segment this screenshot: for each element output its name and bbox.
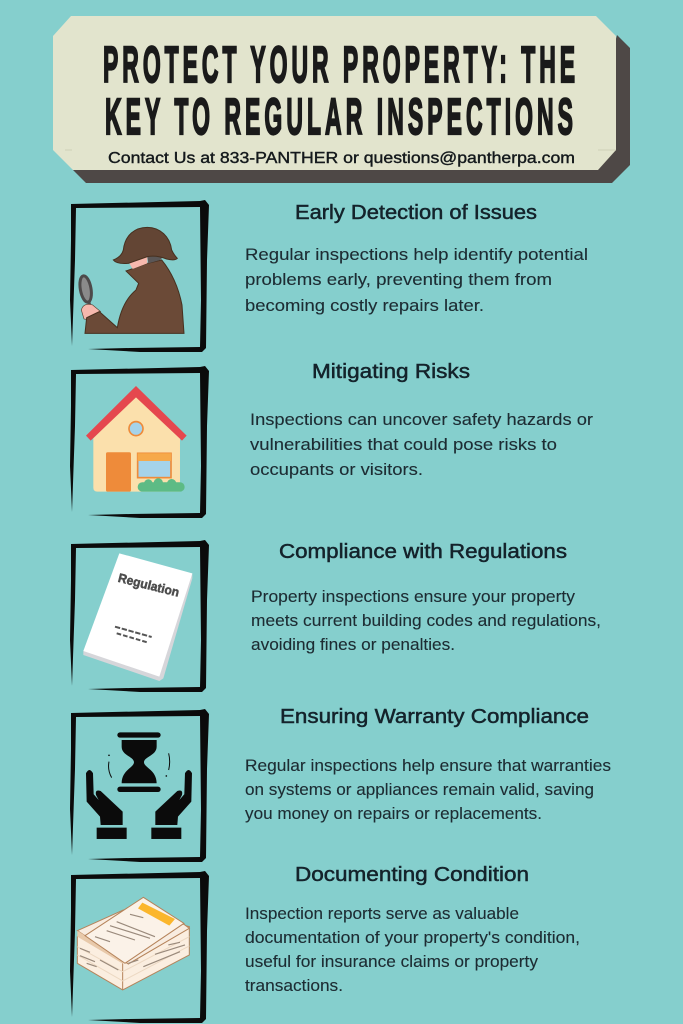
left hand [86,770,127,839]
title banner [53,16,630,183]
body text: meets current building codes and regulations, [251,612,601,630]
body text: vulnerabilities that could pose risks to [250,436,557,454]
body text: on systems or appliances remain valid, saving [245,781,594,799]
panel: documenting condition [70,864,580,1023]
body text [245,905,580,995]
title: PROTECT YOUR PROPERTY: THE [103,37,575,94]
icon: regulation document [83,553,192,681]
body text [250,411,594,479]
heading: Ensuring Warranty Compliance [280,706,589,728]
body text: problems early, preventing them from [245,271,552,289]
panel: compliance with regulations [70,540,601,692]
body text: Regular inspections help ensure that warranties [245,757,611,775]
title: KEY TO REGULAR INSPECTIONS [105,89,573,146]
icon: detective [78,227,184,333]
heading: Compliance with Regulations [279,541,567,563]
body text: transactions. [245,977,343,995]
icon: house [86,386,187,492]
body text: you money on repairs or replacements. [245,805,542,823]
title [103,37,575,146]
heading: Early Detection of Issues [295,202,537,224]
icon: stack of documents [77,897,189,990]
heading: Documenting Condition [295,864,529,886]
panel: mitigating risks [70,361,594,518]
right hand [151,770,192,839]
body text: Inspections can uncover safety hazards or [250,411,594,429]
body text: avoiding fines or penalties. [251,636,455,654]
frame [70,540,209,692]
frame [70,200,209,352]
icon: regulation document: Regulation [117,571,181,600]
body text: becoming costly repairs later. [245,297,484,315]
frame [70,366,209,518]
frame [70,871,209,1023]
icon: hourglass in hands [86,732,192,839]
body text: Regular inspections help identify potential [245,246,588,264]
body text: useful for insurance claims or property [245,953,539,971]
body text: Property inspections ensure your property [251,588,576,606]
panel: early detection [70,200,588,352]
frame [70,709,209,862]
body text: occupants or visitors. [250,461,423,479]
heading: Mitigating Risks [312,361,470,383]
panel: warranty compliance [70,706,611,862]
body text [245,757,611,823]
body text [251,588,601,654]
body text: Inspection reports serve as valuable [245,905,519,923]
contact line: Contact Us at 833-PANTHER or questions@pantherpa.com [108,150,575,167]
body text: documentation of your property's condition, [245,929,580,947]
body text [245,246,588,315]
